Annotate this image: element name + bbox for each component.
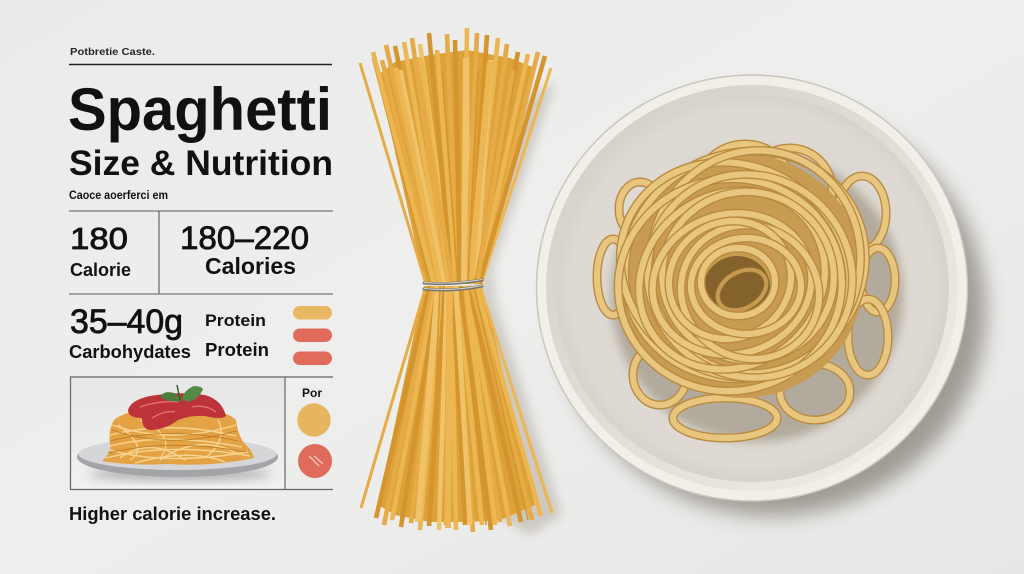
stat: carbohydrates: 35–40g <box>70 303 183 341</box>
plate rim <box>536 75 968 501</box>
protein labels <box>205 311 269 360</box>
protein labels: Protein <box>205 311 266 330</box>
subtitle: Size & Nutrition <box>69 144 333 183</box>
bundle shadow <box>470 80 562 535</box>
title: Spaghetti <box>68 76 332 143</box>
basil <box>160 392 182 402</box>
center hole <box>704 256 770 318</box>
plate well <box>555 94 949 482</box>
stat: 180-220 calories: Calories <box>205 253 296 279</box>
panel: macro stats <box>69 303 332 365</box>
stat: 180-220 calories: 180–220 <box>180 220 309 256</box>
stat: 180-220 calories <box>180 220 309 279</box>
legend pills <box>293 306 332 365</box>
header panel <box>68 46 333 202</box>
sauce <box>128 393 226 430</box>
metal ring <box>424 280 482 290</box>
stat: 180 calorie: 180 <box>70 221 128 256</box>
plate of cooked spaghetti <box>536 75 986 516</box>
inner coils <box>701 248 775 319</box>
label: por: Por <box>302 388 323 400</box>
stat: 180 calorie: Calorie <box>70 260 131 280</box>
stat: 180 calorie <box>70 221 131 280</box>
lower strands <box>361 286 552 532</box>
protein labels: Protein <box>205 340 269 360</box>
noodle shadow <box>611 150 903 442</box>
spaghetti bundle <box>360 28 562 535</box>
caption: Caoce aoerferci em <box>69 190 168 202</box>
image: plate of spaghetti with sauce <box>77 385 278 481</box>
nest body <box>620 154 864 398</box>
panel: served dish <box>70 377 333 490</box>
icon: yellow portion circle <box>297 403 331 437</box>
icon: red portion circle <box>298 444 332 478</box>
outer loops <box>597 144 895 438</box>
coiled strands <box>581 112 903 419</box>
noodle nest <box>581 112 903 438</box>
stat: carbohydrates: Carbohydates <box>69 342 191 362</box>
plate shadow <box>558 104 986 516</box>
footnote: Higher calorie increase. <box>69 503 276 524</box>
stat: carbohydrates <box>69 303 191 362</box>
panel: calorie stats <box>69 211 333 294</box>
upper strands <box>360 28 551 284</box>
eyebrow text: Potbretie Caste. <box>70 46 155 58</box>
